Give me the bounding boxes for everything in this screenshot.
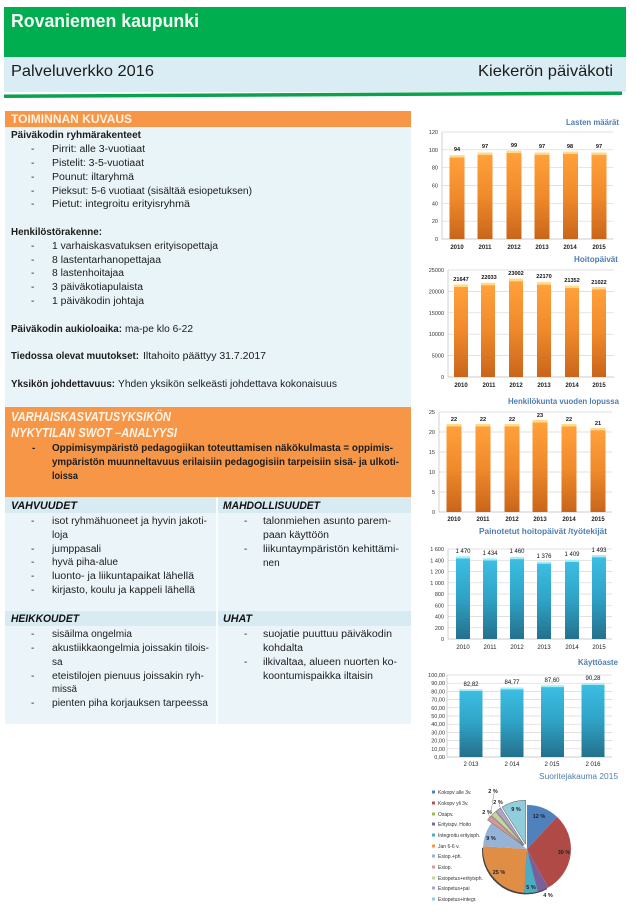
unit manageability [11,379,337,390]
legend [432,790,483,903]
y axis labels: 1 600 [430,547,444,553]
x axis labels: 2010 [447,517,461,523]
y axis labels: 100,00 [428,673,445,679]
x axis labels: 2 013 [463,762,479,768]
y axis labels: 10000 [429,332,444,338]
y axis labels [430,547,444,643]
panel heading [5,111,411,127]
x axis labels: 2011 [476,517,490,523]
y axis labels: 10 [429,470,435,476]
pie value labels [482,789,570,899]
known changes: Iltahoito päättyy 31.7.2017 [143,351,266,362]
x axis labels [450,245,606,251]
y axis labels: 1 200 [430,570,444,576]
group structure list: Pietut: integroitu erityisryhmä [52,199,190,210]
cell: heikkoudet [5,611,216,709]
value labels: 22 [451,417,457,423]
unit manageability: Yksikön johdettavuus: [11,379,115,390]
y axis labels: 200 [435,626,444,632]
cell: vahvuudet: hyvä piha-alue [52,557,118,568]
cell: heikkoudet: missä [52,684,77,695]
y axis labels: 0 [435,237,438,243]
group structure list: - [31,158,34,169]
bars [446,420,606,512]
panel background [5,127,411,407]
cell: uhat [218,611,411,682]
pie value labels: 12 % [533,814,545,820]
staff structure list: - [31,241,34,252]
value labels: 1 376 [536,554,552,560]
value labels: 23 [537,413,543,419]
y axis labels: 80 [432,166,438,172]
y axis labels: 60,00 [431,706,445,712]
x axis labels [447,517,605,523]
x axis labels: 2012 [505,517,519,523]
y axis labels: 25 [429,410,435,416]
value labels: 1 460 [509,549,525,555]
legend: Esiopetus+erityisph. [438,876,483,882]
y axis labels: 20 [432,219,438,225]
value labels: 82,82 [463,682,479,688]
x axis labels: 2014 [563,245,577,251]
x axis labels [454,383,606,389]
pie value labels: 30 % [558,850,570,856]
value labels: 21647 [453,277,469,283]
y axis labels: 20000 [429,289,444,295]
x axis labels [456,645,606,651]
x axis labels: 2 015 [544,762,560,768]
header underline [4,92,622,98]
swot intro text: ympäristön muunneltavuus erilaisiin pedagogisiin tarpeisiin sisä- ja ulkoti- [52,457,399,468]
cell: heikkoudet: HEIKKOUDET [11,613,80,625]
pie leader lines [488,793,501,818]
chart title: Henkilökunta vuoden lopussa [508,397,620,406]
cell: vahvuudet: - [31,557,34,568]
panel: swot table [5,497,411,724]
cell: mahdollisuudet: nen [263,558,280,569]
x axis labels: 2013 [535,245,549,251]
chart: käyttöaste [428,658,619,768]
subtitle: unit name: Kiekerön päiväkoti [478,63,613,80]
value labels: 1 493 [591,548,607,554]
chart: hoitopäivät [429,255,618,389]
cell: vahvuudet: kirjasto, koulu ja kappeli lähellä [52,585,195,596]
value labels: 84,77 [504,680,520,686]
table background [5,497,411,724]
y axis labels: 15000 [429,311,444,317]
x axis labels: 2013 [537,645,551,651]
panel: swot intro [5,407,411,497]
cell: heikkoudet: sa [52,657,63,668]
value labels: 87,60 [544,678,560,684]
bars [456,555,606,639]
known changes: Tiedossa olevat muutokset: [11,351,139,362]
value labels: 21352 [564,278,580,284]
legend: Kokopv alle 3v. [438,790,472,796]
cell: vahvuudet: loja [52,530,68,541]
cell: uhat: UHAT [223,613,253,625]
x axis labels: 2015 [591,517,605,523]
x axis labels: 2012 [509,383,523,389]
swot intro text: loissa [52,471,78,482]
y axis labels: 80,00 [431,689,445,695]
y axis labels: 0 [441,375,444,381]
x axis labels: 2011 [484,645,497,651]
pie value labels: 9 % [511,807,521,813]
bars [460,683,604,757]
cell: vahvuudet: luonto- ja liikuntapaikat lähellä [52,571,194,582]
x axis labels: 2014 [565,383,579,389]
y axis labels: 120 [429,130,438,136]
panel heading: TOIMINNAN KUVAUS [11,112,132,126]
y axis labels: 1 000 [430,581,444,587]
value labels: 22 [480,417,486,423]
cell: uhat: ilkivaltaa, alueen nuorten ko- [263,657,397,668]
cell: uhat: koontumispaikka iltaisin [263,671,373,682]
x axis labels: 2015 [592,383,606,389]
cell: uhat: - [244,629,247,640]
y axis labels: 40 [432,201,438,207]
value labels: 1 409 [564,552,580,558]
value labels: 22 [566,417,572,423]
staff structure list: 8 lastentarhanopettajaa [52,255,161,266]
cell: mahdollisuudet: MAHDOLLISUUDET [223,500,321,512]
x axis labels: 2013 [537,383,551,389]
cell: heikkoudet: pienten piha korjauksen tarpeessa [52,698,208,709]
chart: henkilökunta vuoden lopussa [429,397,620,523]
staff structure list: Henkilöstörakenne: [11,227,102,238]
x axis labels: 2010 [456,645,470,651]
chart title: Painotetut hoitopäivät /työtekijät [479,527,607,536]
opening hours: ma-pe klo 6-22 [125,324,193,335]
chart title: Hoitopäivät [574,255,618,264]
x axis labels: 2 014 [504,762,520,768]
title: Rovaniemen kaupunki [11,11,199,31]
cell: vahvuudet: VAHVUUDET [11,500,78,512]
group structure list: - [31,172,34,183]
cell: vahvuudet: jumppasali [51,544,101,555]
cell: heikkoudet: eteistilojen pienuus joissakin ryh- [52,671,204,682]
legend: Esiop.+ph. [438,854,462,860]
cell: heikkoudet: sisäilma ongelmia [52,629,132,640]
legend: Osapv. [438,812,453,818]
x axis labels: 2010 [450,245,464,251]
pie value labels: 2 % [482,810,492,816]
staff structure list: 1 päiväkodin johtaja [52,296,144,307]
group structure list: Pistelit: 3-5-vuotiaat [52,158,144,169]
value labels: 97 [539,144,545,150]
group structure list: Pieksut: 5-6 vuotiaat (sisältää esiopetuksen) [52,186,252,197]
cell: heikkoudet: - [31,671,34,682]
value labels: 22170 [536,274,552,280]
pie value labels: 25 % [493,870,505,876]
opening hours [11,324,193,335]
legend: Esiopetus+pai [438,886,470,892]
y axis labels: 25000 [429,268,444,274]
swot intro text: Oppimisympäristö pedagogiikan toteuttamisen näkökulmasta = oppimis- [52,443,393,454]
y axis labels: 30,00 [431,730,445,736]
value labels: 22033 [481,275,497,281]
staff structure list: - [31,282,34,293]
x axis labels [463,762,601,768]
cell: vahvuudet: isot ryhmähuoneet ja hyvin jakoti- [52,516,207,527]
staff structure list: - [31,268,34,279]
chart: painotetut hoitopäivät per työtekijät [430,527,612,651]
cell: vahvuudet [5,497,216,596]
cell: mahdollisuudet [218,497,411,569]
pie [482,800,571,894]
cell: uhat: - [244,657,247,668]
cell: uhat: suojatie puuttuu päiväkodin [263,629,392,640]
staff structure list: 3 päiväkotiapulaista [52,282,143,293]
cell: heikkoudet: - [31,643,34,654]
y axis labels: 0 [432,510,435,516]
header green band [4,7,626,57]
y axis labels: 15 [429,450,435,456]
cell: uhat: kohdalta [263,643,303,654]
y axis labels: 90,00 [431,681,445,687]
y axis labels: 20 [429,430,435,436]
opening hours: Päiväkodin aukioloaika: [11,324,122,335]
staff structure list: 1 varhaiskasvatuksen erityisopettaja [52,241,218,252]
y axis labels [429,410,435,516]
pie value labels: 5 % [526,885,536,891]
swot heading: VARHAISKASVATUSYKSIKÖN [11,409,172,424]
panel: toiminnan kuvaus [5,111,411,407]
y axis labels: 800 [435,592,444,598]
swot background [5,407,411,497]
cell: mahdollisuudet: - [244,544,247,555]
known changes [11,351,266,362]
value labels: 22 [509,417,515,423]
cell: heikkoudet: akustiikkaongelmia joissakin tilois- [52,643,209,654]
value labels: 1 470 [455,549,471,555]
bars [454,279,606,377]
value labels: 97 [596,144,602,150]
legend: Erityispv. Hoito [438,822,471,828]
page header [4,7,626,98]
group structure list: Päiväkodin ryhmärakenteet [11,130,142,141]
y axis labels: 0 [441,637,444,643]
y axis labels: 20,00 [431,739,445,745]
x axis labels: 2013 [533,517,547,523]
cell: heikkoudet: - [31,698,34,709]
x axis labels: 2014 [565,645,579,651]
x axis labels: 2012 [510,645,524,651]
y axis labels: 40,00 [431,722,445,728]
legend: Jan 6-6 v. [438,844,460,850]
y axis labels: 5 [432,490,435,496]
group structure list: Pirrit: alle 3-vuotiaat [52,144,145,155]
subtitle: service network: Palveluverkko 2016 [11,63,154,80]
group structure list [11,130,252,210]
x axis labels: 2011 [482,383,496,389]
swot intro text: - [32,443,35,454]
value labels [453,271,607,286]
value labels [454,143,602,153]
x axis labels: 2 016 [585,762,601,768]
chart: lasten määrät [429,118,619,251]
x axis labels: 2011 [478,245,492,251]
swot heading: NYKYTILAN SWOT –ANALYYSI [11,425,177,440]
staff structure list: - [31,255,34,266]
value labels: 1 434 [482,551,498,557]
value labels [451,413,601,427]
x axis labels: 2015 [592,245,606,251]
cell: mahdollisuudet: paan käyttöön [263,530,329,541]
legend: Esiopetus+integr. [438,897,476,903]
group structure list: Pounut: iltaryhmä [52,172,134,183]
pie value labels: 2 % [488,789,498,795]
y axis labels: 50,00 [431,714,445,720]
swot heading [11,409,177,440]
value labels: 90,28 [585,676,601,682]
cell: vahvuudet: - [31,516,34,527]
value labels: 97 [482,144,488,150]
y axis labels: 70,00 [431,698,445,704]
pie value labels: 4 % [543,893,553,899]
y axis labels: 0,00 [434,755,445,761]
value labels: 94 [454,147,461,153]
chart title: Suoritejakauma 2015 [539,772,619,781]
value labels [463,676,601,688]
value labels [455,548,607,560]
x axis labels: 2012 [507,245,521,251]
y axis labels: 1 400 [430,558,444,564]
legend: Esiop. [438,865,452,871]
group structure list: - [31,186,34,197]
staff structure list [11,227,218,307]
header subtitle band [4,57,626,92]
chart title: Käyttöaste [578,658,619,667]
pie value labels: 2 % [493,800,503,806]
group structure list: - [31,144,34,155]
value labels: 21 [595,421,601,427]
staff structure list: 8 lastenhoitajaa [52,268,124,279]
y axis labels: 600 [435,603,444,609]
value labels: 98 [567,144,573,150]
value labels: 21022 [591,280,607,286]
legend: Integroitu erityisph. [438,833,480,839]
unit manageability: Yhden yksikön selkeästi johdettava kokonaisuus [118,379,337,390]
chart title: Lasten määrät [566,118,619,127]
swot intro text [32,443,399,482]
cell: heikkoudet: - [31,629,34,640]
cell: mahdollisuudet: - [244,516,247,527]
cell: vahvuudet: - [31,544,34,555]
value labels: 23002 [508,271,524,277]
y axis labels: 400 [435,614,444,620]
x axis labels: 2015 [592,645,606,651]
cell: mahdollisuudet: liikuntaympäristön kehittämi- [263,544,399,555]
y axis labels [428,673,445,761]
group structure list: - [31,199,34,210]
y axis labels [429,130,438,243]
value labels: 99 [511,143,517,149]
staff structure list: - [31,296,34,307]
y axis labels: 5000 [432,354,444,360]
legend: Kokopv yli 3v. [438,801,468,807]
cell: mahdollisuudet: talonmiehen asunto parem- [263,516,391,527]
cell: vahvuudet: - [31,585,34,596]
pie value labels: 9 % [486,836,496,842]
bars [450,151,606,239]
y axis labels: 10,00 [431,747,445,753]
y axis labels: 100 [429,148,438,154]
chart: suoritejakauma [432,772,619,903]
x axis labels: 2010 [454,383,468,389]
y axis labels [429,268,444,381]
cell: vahvuudet: - [31,571,34,582]
x axis labels: 2014 [562,517,576,523]
y axis labels: 60 [432,184,438,190]
